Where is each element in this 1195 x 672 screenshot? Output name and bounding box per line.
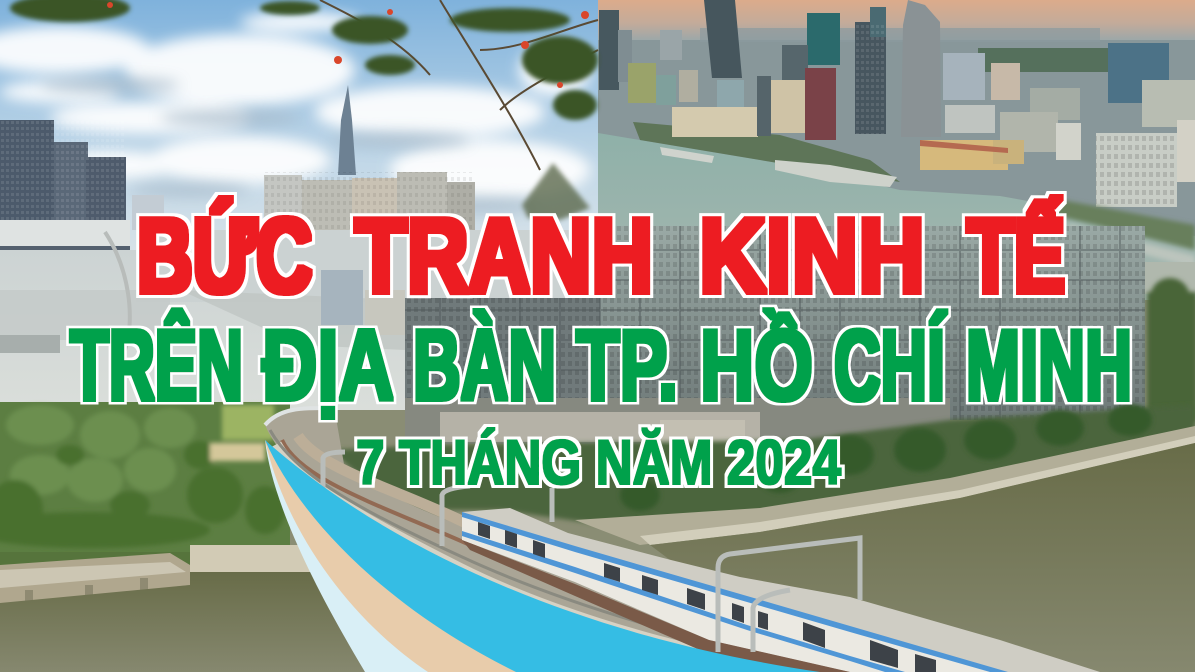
background: left sky with clouds <box>0 0 600 300</box>
title line 2: BÀN <box>413 310 556 422</box>
title line 3: 7 THÁNG NĂM 2024 <box>356 428 841 498</box>
background: left river with pale buildings and bridge <box>0 230 606 410</box>
title line 2: HỒ <box>700 310 813 422</box>
background: left lower bank and pier <box>0 545 312 606</box>
tree branches and foliage at top <box>10 0 598 220</box>
background: faded glass tower <box>405 226 1195 420</box>
background: trees at right edge <box>1147 278 1195 422</box>
swoosh: light blue band <box>265 440 430 672</box>
background: right trees and riverside walk <box>330 404 1195 545</box>
title line 2 <box>70 310 1132 422</box>
background: left water <box>0 572 385 672</box>
title line 1: TRANH <box>355 197 653 315</box>
background: right water <box>650 443 1195 672</box>
overhead line poles <box>323 452 860 652</box>
title line 1 <box>137 197 1065 315</box>
title line 2: ĐỊA <box>262 310 394 422</box>
background: left skyline with Landmark tower <box>0 85 475 252</box>
title line 1: TẾ <box>967 197 1065 315</box>
title line 2: TRÊN <box>70 310 243 422</box>
background: green trees left bank <box>0 402 290 552</box>
title line 2: CHÍ <box>834 310 947 422</box>
title line 1: BỨC <box>137 197 312 315</box>
metro viaduct and track <box>265 408 960 672</box>
title line 2: TP. <box>576 310 678 422</box>
swoosh: beige band <box>265 440 518 672</box>
title line 1: KINH <box>699 197 925 315</box>
metro train <box>462 508 1100 672</box>
background: right city skyline at dusk <box>598 0 1195 236</box>
swoosh: cyan band <box>265 440 820 672</box>
background: shoreline trees on far bank <box>1040 196 1195 268</box>
background: right river <box>598 120 1195 300</box>
background: building base above riverside <box>405 398 950 445</box>
